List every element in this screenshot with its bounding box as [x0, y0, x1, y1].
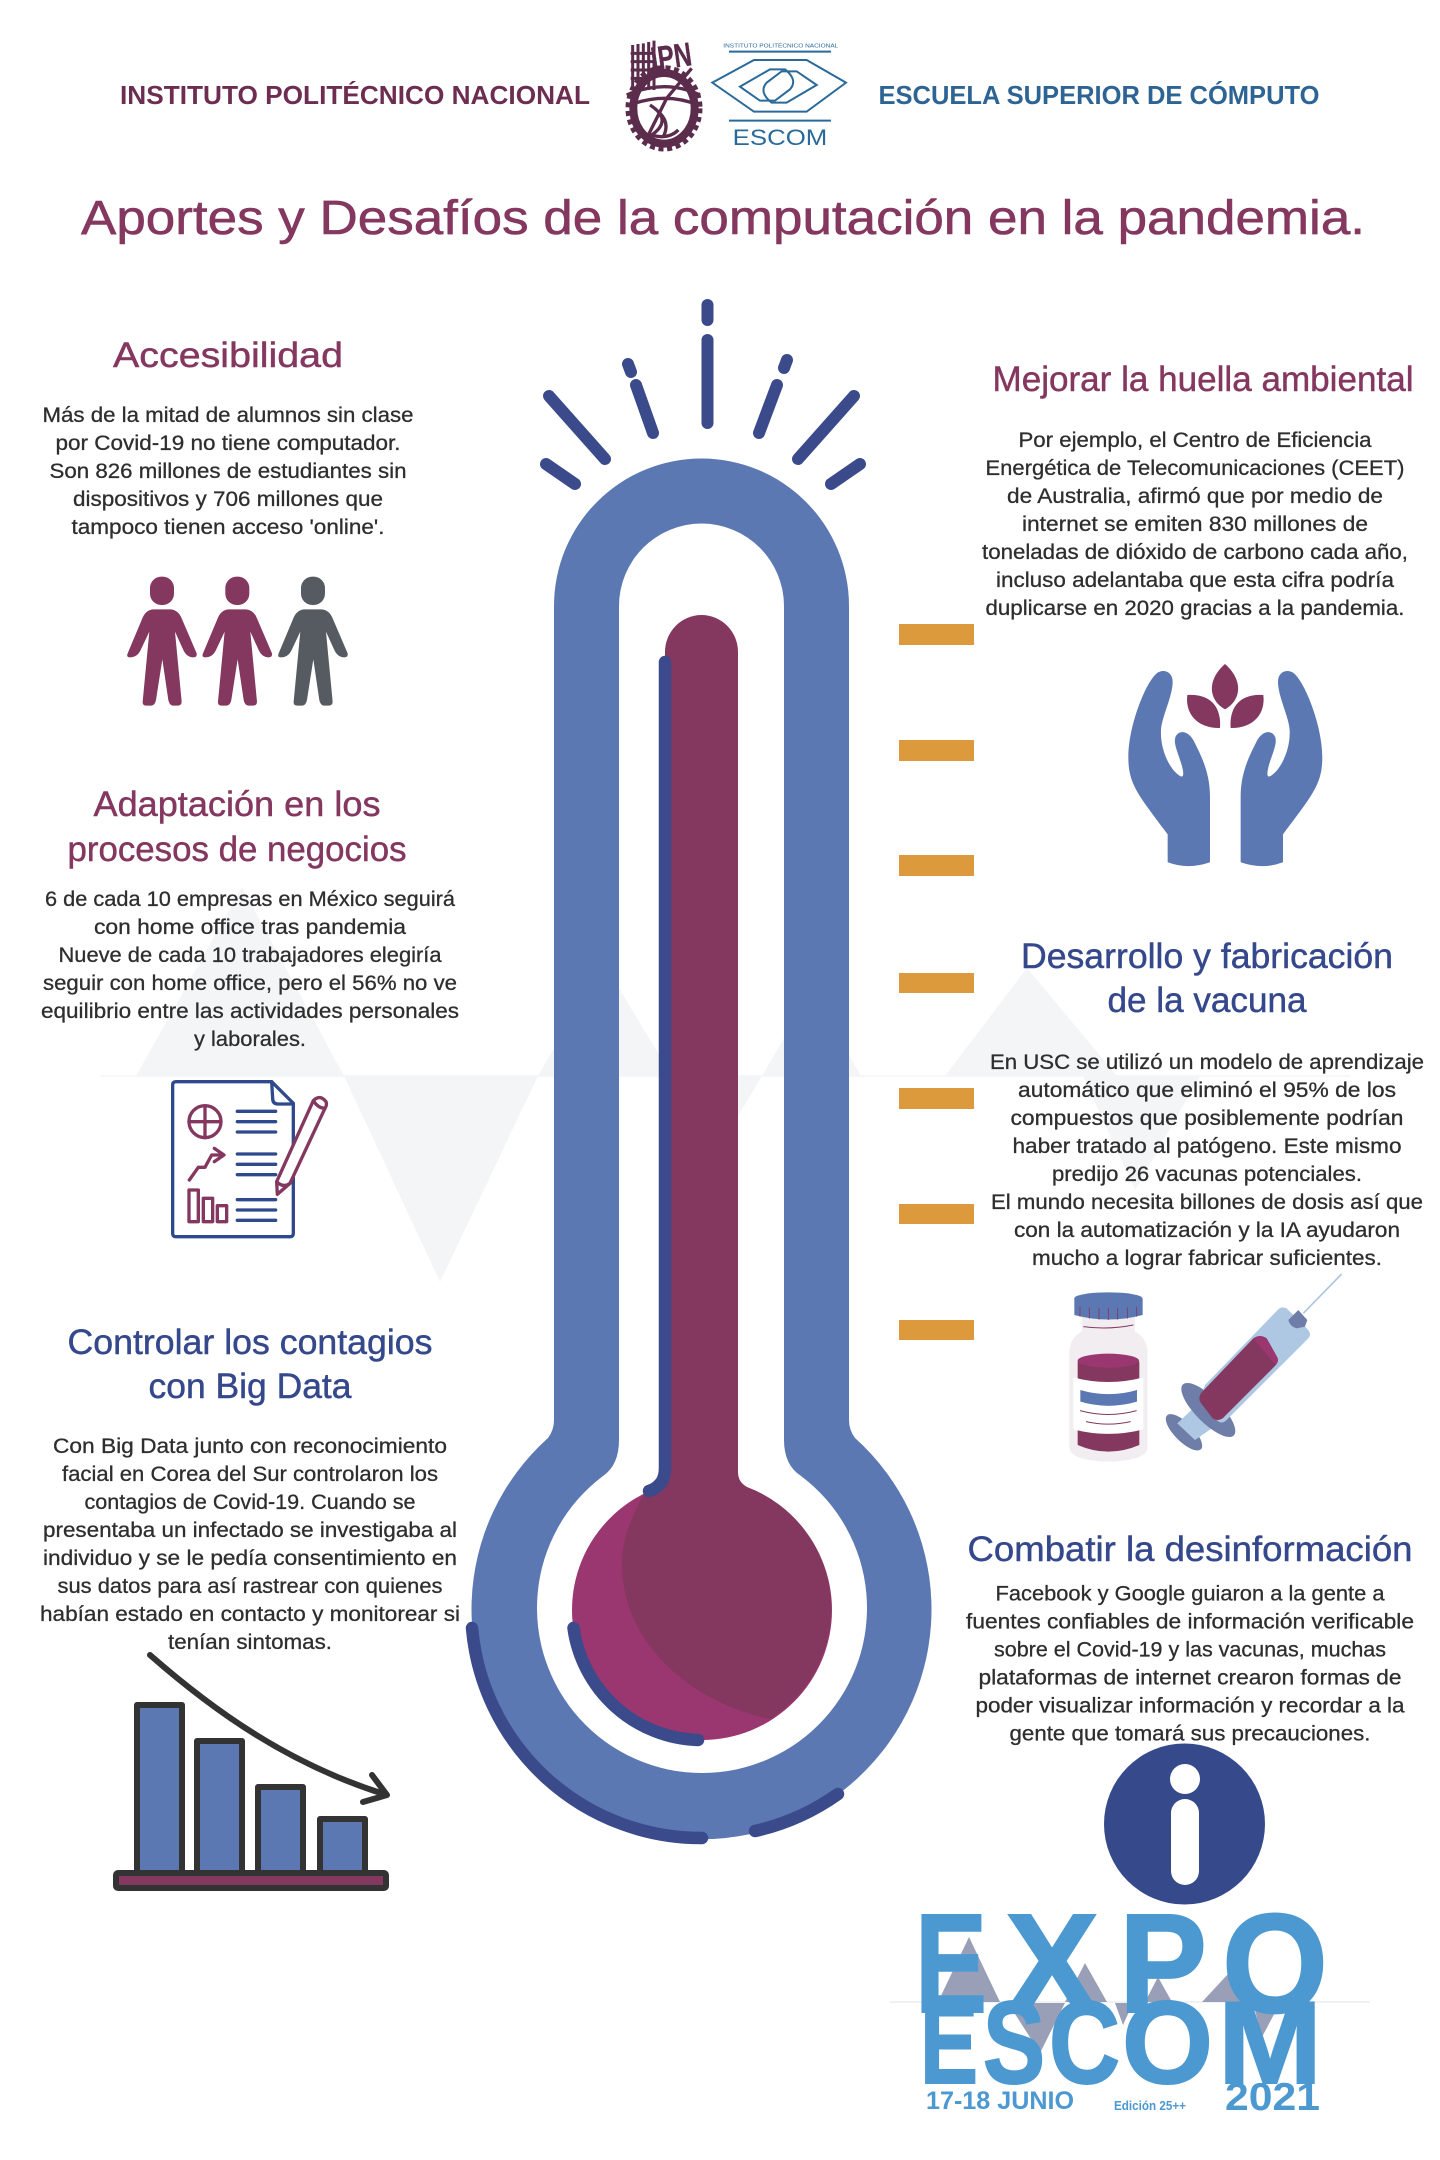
icon: vaccine vial — [1069, 1292, 1148, 1462]
icon: syringe — [1160, 1274, 1342, 1456]
text block: sobre el Covid-19 y las vacunas, muchas — [994, 1638, 1386, 1662]
scale marks — [899, 624, 974, 1340]
text block: contagios de Covid-19. Cuando se — [84, 1490, 416, 1514]
heading: Combatir la desinformación — [968, 1530, 1412, 1569]
wordmark: ESCOM: M — [1218, 1977, 1322, 2108]
highlight strokes — [472, 662, 838, 1838]
text block — [966, 1582, 1414, 1746]
text block: gente que tomará sus precauciones. — [1010, 1722, 1370, 1746]
text block: mucho a lograr fabricar suficientes. — [1032, 1246, 1382, 1270]
text block — [40, 1434, 460, 1654]
heading: Adaptación en los — [94, 785, 380, 824]
text block: por Covid-19 no tiene computador. — [56, 431, 401, 455]
text block: con la automatización y la IA ayudaron — [1014, 1218, 1400, 1242]
wordmark: ESCOM: O — [1122, 1977, 1213, 2108]
logo: IPN crest — [627, 36, 700, 149]
text block: internet se emiten 830 millones de — [1022, 512, 1368, 536]
text block: dispositivos y 706 millones que — [73, 487, 383, 511]
text block: El mundo necesita billones de dosis así que — [991, 1190, 1423, 1214]
heading — [1021, 937, 1393, 1020]
text block: Son 826 millones de estudiantes sin — [50, 459, 406, 483]
date: 17-18 JUNIO — [926, 2087, 1074, 2115]
text block: haber tratado al patógeno. Este mismo — [1012, 1134, 1402, 1158]
panel: Mejorar la huella ambiental — [982, 360, 1414, 866]
wordmark: ESCOM: E — [920, 1977, 978, 2108]
panel: Adaptación en los procesos de negocios — [41, 785, 459, 1237]
text block: tenían sintomas. — [168, 1630, 332, 1654]
text block: Con Big Data junto con reconocimiento — [53, 1434, 447, 1458]
logo: ESCOM: ESCOM — [733, 125, 827, 150]
edition: Edición 25++ — [1114, 2099, 1186, 2113]
wordmark: ESCOM: S — [983, 1977, 1045, 2108]
heading: Mejorar la huella ambiental — [992, 360, 1414, 399]
text block: En USC se utilizó un modelo de aprendizaje — [990, 1050, 1424, 1074]
wordmark: EXPO — [915, 1884, 1328, 2042]
text block: toneladas de dióxido de carbono cada año, — [982, 540, 1408, 564]
text block: individuo y se le pedía consentimiento en — [43, 1546, 457, 1570]
text block: poder visualizar información y recordar a la — [976, 1694, 1405, 1718]
panel: Combatir la desinformación — [966, 1530, 1414, 1904]
icon: radiating lines — [546, 305, 860, 484]
text block: automático que eliminó el 95% de los — [1018, 1078, 1396, 1102]
mercury column — [622, 615, 831, 1719]
text block: compuestos que posiblemente podrían — [1010, 1106, 1404, 1130]
wordmark: ESCOM: C — [1049, 1977, 1120, 2108]
text block — [990, 1050, 1424, 1270]
icon: document with pencil — [173, 1082, 326, 1237]
year: 2021 — [1225, 2076, 1320, 2119]
text block: Más de la mitad de alumnos sin clase — [42, 403, 413, 427]
panel: Controlar los contagios con Big Data — [40, 1323, 460, 1888]
mercury bulb — [572, 1480, 832, 1740]
logo: Expo ESCOM 2021 — [890, 1884, 1370, 2119]
text block: tampoco tienen acceso 'online'. — [72, 515, 384, 539]
heading: Desarrollo y fabricación — [1021, 937, 1393, 976]
text block: sus datos para así rastrear con quienes — [58, 1574, 442, 1598]
heading — [68, 1323, 432, 1406]
text block: y laborales. — [194, 1027, 306, 1051]
wordmark: EXPO: E — [915, 1884, 987, 2042]
panel: Accesibilidad — [42, 336, 413, 706]
icon: three people — [127, 577, 348, 706]
logo: ESCOM: INSTITUTO POLITÉCNICO NACIONAL — [723, 42, 838, 49]
text block: fuentes confiables de información verificable — [966, 1610, 1414, 1634]
text block — [982, 428, 1408, 620]
header: Instituto Politécnico Nacional: INSTITUTO POLITÉCNICO NACIONAL — [120, 80, 590, 110]
heading: procesos de negocios — [68, 830, 406, 869]
heading: Accesibilidad — [113, 336, 343, 375]
text block: equilibrio entre las actividades personales — [41, 999, 459, 1023]
panel: Desarrollo y fabricación de la vacuna — [990, 937, 1424, 1462]
text block: de Australia, afirmó que por medio de — [1007, 484, 1383, 508]
text block: facial en Corea del Sur controlaron los — [62, 1462, 438, 1486]
header: Escuela Superior de Cómputo: ESCUELA SUPERIOR DE CÓMPUTO — [878, 80, 1320, 110]
text block: predijo 26 vacunas potenciales. — [1052, 1162, 1362, 1186]
heading: Controlar los contagios — [68, 1323, 432, 1362]
logo: IPN crest: IPN — [649, 36, 694, 79]
wordmark: EXPO: P — [1119, 1884, 1207, 2042]
icon: hands holding leaves — [1128, 664, 1322, 866]
text block: plataformas de internet crearon formas de — [978, 1666, 1402, 1690]
text block: con home office tras pandemia — [94, 915, 406, 939]
text block: incluso adelantaba que esta cifra podría — [996, 568, 1394, 592]
wordmark: EXPO: O — [1222, 1884, 1328, 2042]
text block: duplicarse en 2020 gracias a la pandemia. — [986, 596, 1404, 620]
wordmark: EXPO: X — [1005, 1884, 1099, 2042]
title: Aportes y Desafíos de la computación en la pandemia. — [81, 192, 1365, 245]
text block: presentaba un infectado se investigaba al — [43, 1518, 457, 1542]
text block: Nueve de cada 10 trabajadores elegiría — [58, 943, 442, 967]
text block: Por ejemplo, el Centro de Eficiencia — [1018, 428, 1372, 452]
bar chart: falling trend — [116, 1655, 387, 1888]
logo: ESCOM — [712, 42, 846, 150]
text block: seguir con home office, pero el 56% no ve — [43, 971, 457, 995]
heading: de la vacuna — [1108, 981, 1307, 1020]
heading — [68, 785, 406, 869]
heading: con Big Data — [148, 1367, 352, 1406]
text block: Energética de Telecomunicaciones (CEET) — [986, 456, 1404, 480]
text block: 6 de cada 10 empresas en México seguirá — [45, 887, 455, 911]
thermometer — [472, 305, 974, 1839]
text block — [42, 403, 413, 539]
icon: information — [1104, 1744, 1265, 1904]
wordmark: ESCOM — [920, 1977, 1322, 2108]
text block: Facebook y Google guiaron a la gente a — [996, 1582, 1385, 1606]
text block: habían estado en contacto y monitorear si — [40, 1602, 460, 1626]
text block — [41, 887, 459, 1051]
thermometer glass — [472, 459, 932, 1839]
